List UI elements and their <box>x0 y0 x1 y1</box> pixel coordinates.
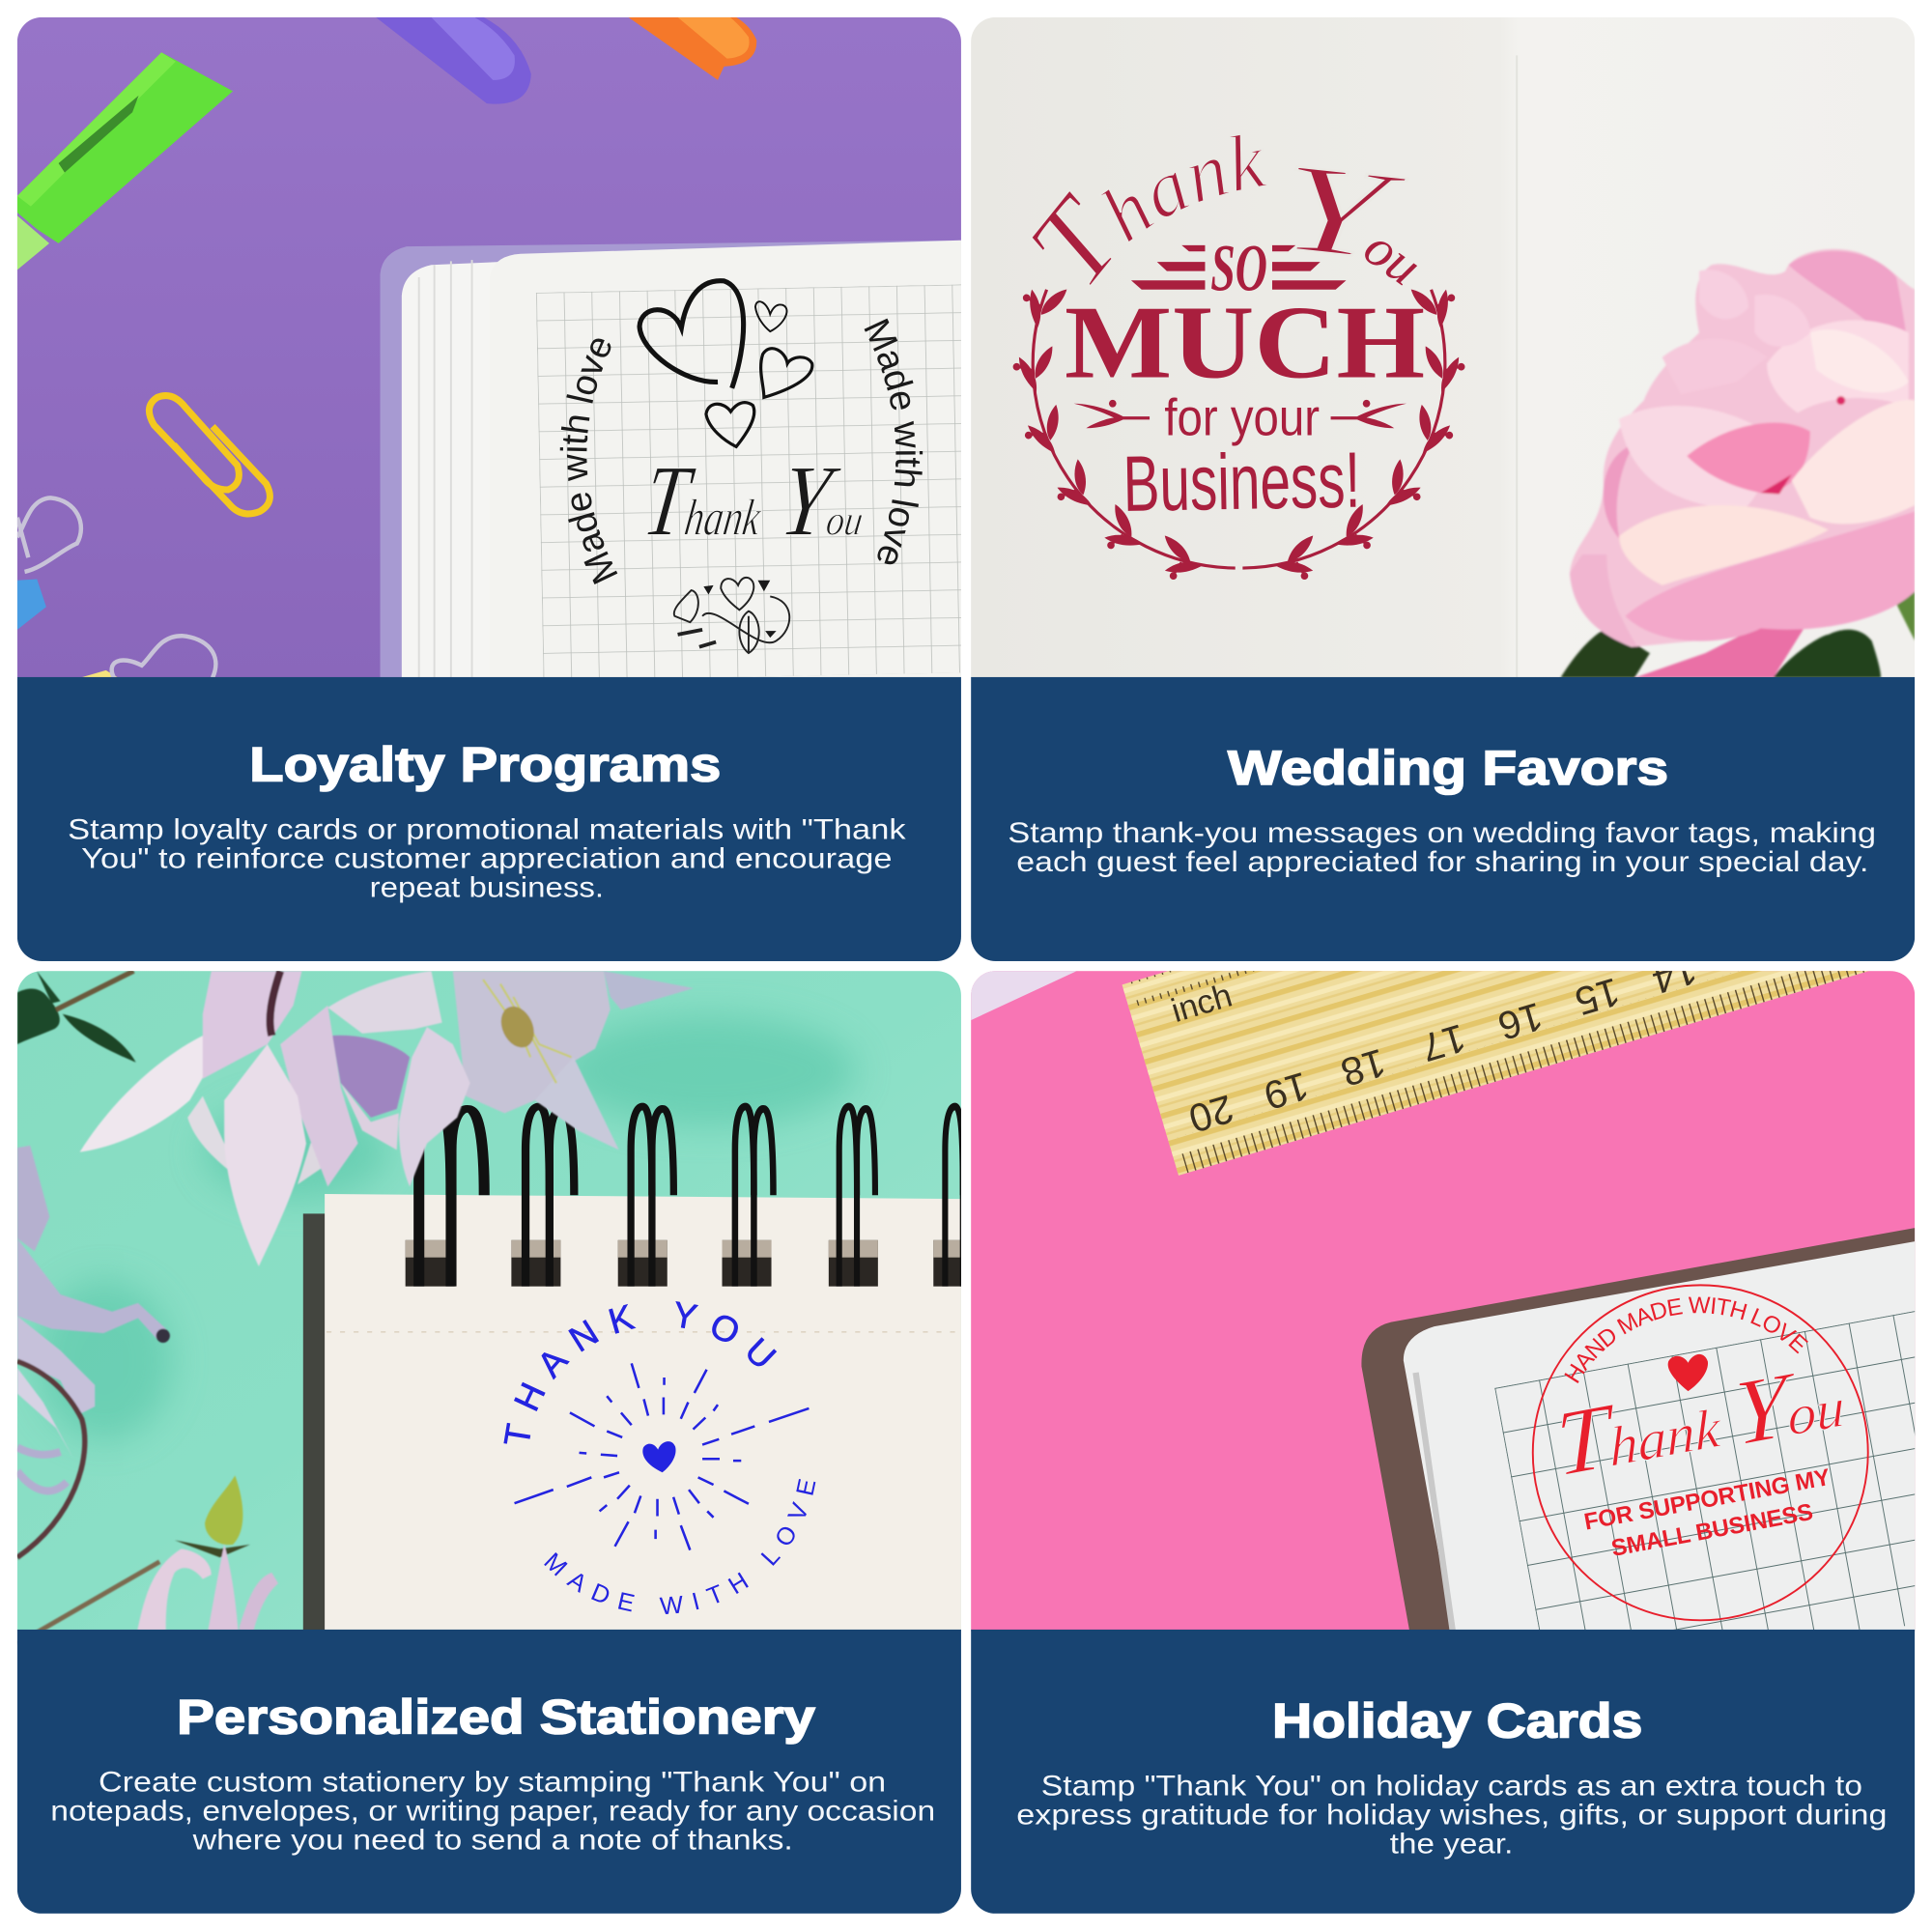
photo background: teal <box>17 971 961 1632</box>
small heart ornament <box>674 578 789 653</box>
stamp: thank you red <box>1533 1285 1868 1620</box>
description: Stamp thank-you messages on wedding favor tags, making <box>1008 817 1876 849</box>
description <box>1016 1770 1888 1860</box>
panel: wedding favors <box>971 17 1915 961</box>
script thank: Thank <box>1554 1362 1723 1496</box>
wooden ruler: 18 <box>1336 1040 1391 1095</box>
curved thank you: THANK YOU <box>503 1301 777 1444</box>
heading: Wedding Favors <box>1228 741 1668 795</box>
caption box <box>17 677 961 961</box>
caption box <box>971 1630 1915 1914</box>
wooden ruler: inch <box>1167 978 1236 1030</box>
curved text right: Made with love <box>864 319 923 564</box>
card fold <box>1516 55 1519 677</box>
script you: You <box>1732 1342 1846 1465</box>
description <box>1008 817 1876 878</box>
wooden ruler: 16 <box>1493 994 1548 1049</box>
notebook <box>381 241 975 681</box>
description: You" to reinforce customer appreciation and encourage <box>81 843 893 875</box>
right lily <box>453 971 611 1113</box>
main lily <box>187 1096 233 1174</box>
curved hand made text: HAND MADE WITH LOVE <box>1564 1296 1808 1383</box>
so with stripes <box>1131 231 1347 304</box>
hearts <box>639 281 812 446</box>
script y: Y <box>1274 136 1411 289</box>
script ou: ou <box>1365 242 1418 286</box>
wooden ruler: 14 <box>1647 948 1702 1003</box>
stamp: made with love hearts <box>560 278 923 655</box>
wooden ruler: 17 <box>1416 1015 1471 1070</box>
panel: holiday cards <box>971 740 1932 1914</box>
description <box>50 1767 935 1857</box>
bud and lower flowers <box>205 1475 242 1545</box>
notebook with grid <box>1361 1228 1932 1691</box>
description: repeat business. <box>370 872 604 904</box>
wooden ruler: 20 <box>1184 1087 1238 1142</box>
wooden ruler <box>1122 740 1932 1176</box>
flowers <box>17 971 694 1647</box>
stamp: thank you sunburst <box>497 1293 821 1620</box>
description: notepads, envelopes, or writing paper, ready for any occasion <box>50 1796 935 1828</box>
much: MUCH <box>1065 284 1425 400</box>
description: Stamp loyalty cards or promotional materials with "Thank <box>68 814 907 846</box>
description: where you need to send a note of thanks. <box>192 1825 793 1857</box>
panel: loyalty programs <box>17 17 961 961</box>
yellow paperclip <box>149 396 270 514</box>
orange pen cap <box>629 17 756 80</box>
photo background: white card <box>971 17 1915 678</box>
wooden ruler: 19 <box>1259 1064 1314 1119</box>
for your: for your <box>1164 389 1320 446</box>
heading: Loyalty Programs <box>249 738 721 792</box>
script you: You <box>775 444 873 556</box>
leaves and stems <box>17 989 60 1044</box>
description: Stamp "Thank You" on holiday cards as an extra touch to <box>1041 1770 1862 1802</box>
green marker <box>17 52 233 270</box>
for supporting my: FOR SUPPORTING MY <box>1582 1464 1833 1535</box>
arrows <box>1074 400 1406 428</box>
caption box <box>17 1630 961 1914</box>
soft shadows on teal <box>37 1015 857 1440</box>
so with stripes: SO <box>1210 231 1267 304</box>
curved text left: Made with love <box>560 338 618 584</box>
panel: personalized stationery <box>17 971 982 1914</box>
heading: Holiday Cards <box>1272 1694 1642 1748</box>
heart <box>1668 1354 1708 1391</box>
description: express gratitude for holiday wishes, gifts, or support during <box>1016 1799 1888 1831</box>
stamp: thank you so much <box>1004 115 1467 584</box>
heading: Personalized Stationery <box>177 1690 815 1745</box>
description <box>68 814 907 904</box>
heart <box>642 1441 676 1472</box>
business: Business! <box>1122 437 1361 528</box>
iridescent object <box>971 971 1077 1020</box>
small business: SMALL BUSINESS <box>1609 1499 1815 1562</box>
binder clips <box>17 497 215 678</box>
wreath <box>1010 282 1467 584</box>
notebook <box>303 1106 982 1633</box>
script thank: Thank <box>638 444 771 556</box>
curved made with love: MADE WITH LOVE <box>544 1479 815 1614</box>
description: each guest feel appreciated for sharing in your special day. <box>1016 846 1868 878</box>
wooden ruler: 15 <box>1570 969 1625 1024</box>
left lily <box>17 1146 49 1251</box>
description: Create custom stationery by stamping "Thank You" on <box>99 1767 886 1799</box>
peony flower <box>1560 249 1915 678</box>
purple pen cap <box>376 17 531 104</box>
description: the year. <box>1390 1828 1513 1860</box>
photo background: purple paper <box>17 17 961 678</box>
rays <box>515 1363 809 1550</box>
caption box <box>971 677 1915 961</box>
photo background: pink paper <box>971 971 1915 1632</box>
script thank: Thank <box>1032 135 1267 285</box>
